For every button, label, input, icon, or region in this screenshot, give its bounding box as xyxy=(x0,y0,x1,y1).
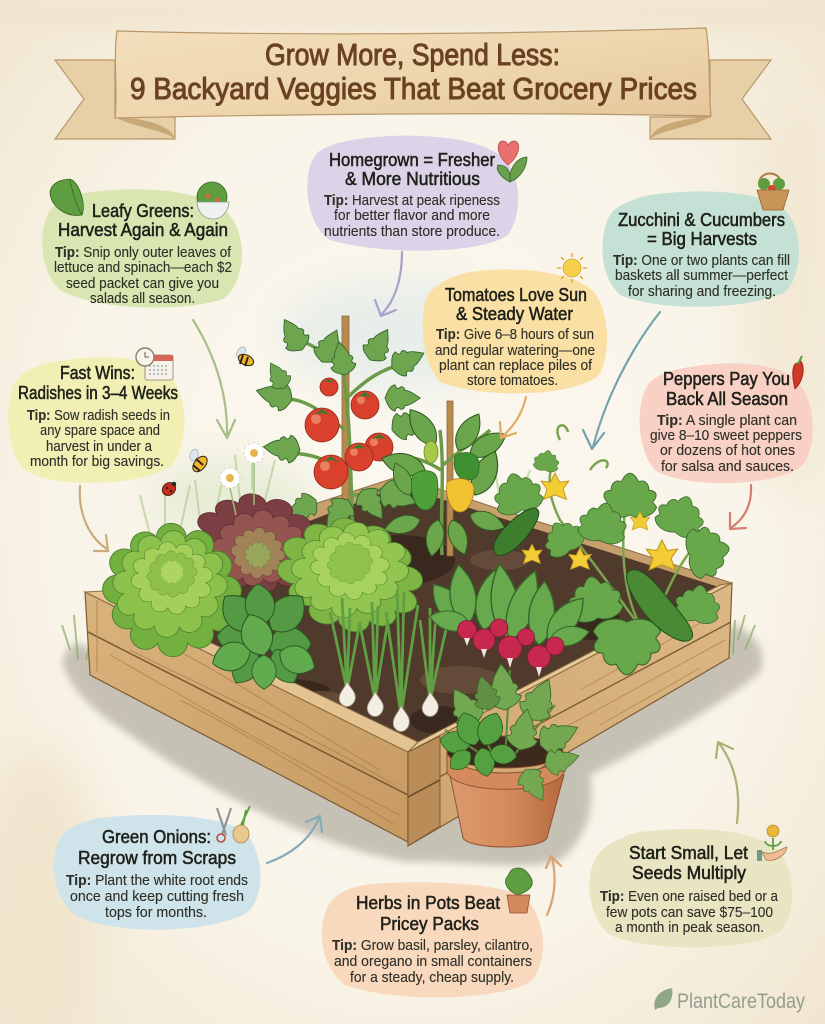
icon: scissors and onion xyxy=(217,806,250,843)
watermark: PlantCareToday xyxy=(654,988,805,1013)
icon: salad bowl xyxy=(197,182,229,219)
callout: homegrown: & More Nutritious xyxy=(345,168,480,189)
peppers xyxy=(411,441,479,512)
callout: tomatoes: Tip: Give 6–8 hours of sun xyxy=(436,327,594,343)
callout: leafy greens xyxy=(42,179,242,308)
green onions xyxy=(330,590,447,732)
callout: fast wins: month for big savings. xyxy=(30,454,164,470)
callout: zucchini and cucumbers: Zucchini & Cucumbers xyxy=(618,209,785,230)
callout: fast wins: any spare space and xyxy=(40,423,160,439)
callout: green onions: Green Onions: xyxy=(102,826,211,847)
raised wooden bed xyxy=(85,476,732,846)
callout: tomatoes: plant can replace piles of xyxy=(439,358,593,374)
callout: green onions xyxy=(54,806,260,930)
callout: leafy greens: Tip: Snip only outer leaves of xyxy=(55,245,232,261)
icon: chili xyxy=(793,356,803,389)
callout: peppers: for salsa and sauces. xyxy=(661,459,794,475)
callout: homegrown: nutrients than store produce. xyxy=(324,224,500,240)
callout: start small: few pots can save $75–100 xyxy=(606,905,773,921)
arrow: peppers xyxy=(730,485,751,529)
arrow: radishes xyxy=(80,486,108,551)
callout: zucchini and cucumbers: Tip: One or two plants can fill xyxy=(613,253,790,269)
title text: 9 Backyard Veggies That Beat Grocery Prices xyxy=(130,71,697,106)
title banner xyxy=(55,28,771,139)
cucumber and zucchini vines xyxy=(489,425,733,675)
tomato stake xyxy=(342,316,349,531)
callout: tomatoes: & Steady Water xyxy=(456,303,573,324)
arrow: herbs xyxy=(546,856,561,915)
lettuce trio xyxy=(90,484,433,670)
callout: leafy greens: salads all season. xyxy=(90,291,195,307)
icon: coin plant in hand xyxy=(757,825,787,861)
callout: green onions: tops for months. xyxy=(105,905,207,921)
spinach xyxy=(208,582,320,689)
callout: tomatoes: store tomatoes. xyxy=(467,373,558,389)
ladybug xyxy=(160,480,178,498)
callout: start small xyxy=(589,825,792,947)
potted herbs xyxy=(438,662,584,807)
callout: fast wins: harvest in under a xyxy=(46,439,153,455)
callout: herbs: Pricey Packs xyxy=(380,913,479,934)
callout: fast wins: Radishes in 3–4 Weeks xyxy=(18,382,178,403)
cucumbers xyxy=(494,508,693,641)
bed: front corner post xyxy=(408,736,440,846)
callout: leafy greens: Harvest Again & Again xyxy=(58,219,228,240)
icon: potted herb xyxy=(505,868,532,913)
arrow: green onions xyxy=(267,816,322,863)
arrow: tomatoes xyxy=(500,397,526,438)
callout: peppers: Tip: A single plant can xyxy=(657,413,797,429)
green lettuce right xyxy=(267,504,433,646)
callout: peppers xyxy=(640,356,813,483)
callout: leafy greens: lettuce and spinach—each $2 xyxy=(54,260,232,276)
callout: start small: Seeds Multiply xyxy=(632,862,747,883)
bed: right wall xyxy=(408,583,732,846)
icon: clock and calendar xyxy=(136,348,173,380)
callout: start small: Tip: Even one raised bed or a xyxy=(600,889,779,905)
bed: soil xyxy=(105,486,722,745)
callout: zucchini and cucumbers: baskets all summer—perfect xyxy=(615,268,788,284)
pepper plant xyxy=(379,401,511,558)
bed: left wall xyxy=(85,592,408,842)
arrow: homegrown xyxy=(375,252,402,316)
arrow: zucchini xyxy=(583,312,660,449)
callout: peppers: Back All Season xyxy=(666,388,788,409)
arrow: leafy greens xyxy=(193,320,235,438)
herb pot xyxy=(438,662,584,847)
callout: peppers: give 8–10 sweet peppers xyxy=(650,428,802,444)
callout: green onions: once and keep cutting fresh xyxy=(70,889,244,905)
callout: zucchini and cucumbers xyxy=(602,174,799,307)
callout: leafy greens: seed packet can give you xyxy=(66,276,219,292)
callout: fast wins xyxy=(8,348,185,483)
callout: green onions: Regrow from Scraps xyxy=(78,847,236,868)
ground shadow under the bed xyxy=(62,625,762,865)
arrows xyxy=(80,252,751,915)
callout: herbs: Tip: Grow basil, parsley, cilantro, xyxy=(332,938,533,954)
callout: zucchini and cucumbers: = Big Harvests xyxy=(647,228,757,249)
bee top xyxy=(234,345,255,368)
callout: herbs: Herbs in Pots Beat xyxy=(356,892,500,913)
terracotta pot xyxy=(447,736,564,847)
watermark: PlantCareToday: PlantCareToday xyxy=(677,990,805,1013)
callout: zucchini and cucumbers: for sharing and freezing. xyxy=(628,284,776,300)
bed: back walls xyxy=(100,476,732,605)
icon: lettuce xyxy=(50,179,83,215)
callout: peppers: Peppers Pay You xyxy=(663,368,790,389)
bees and ladybug xyxy=(160,345,264,515)
callout: herbs: and oregano in small containers xyxy=(334,954,532,970)
callout: leafy greens: Leafy Greens: xyxy=(92,200,194,221)
callout: tomatoes: Tomatoes Love Sun xyxy=(445,284,587,305)
callout: homegrown xyxy=(307,136,527,251)
bee lower xyxy=(188,448,210,474)
callout: herbs xyxy=(322,868,543,997)
title text: Grow More, Spend Less: xyxy=(265,37,560,72)
callout: start small: Start Small, Let xyxy=(629,842,748,863)
garden wash: grasses behind bed xyxy=(62,445,755,660)
red lettuce xyxy=(186,484,330,602)
callout: tomatoes xyxy=(423,253,607,393)
radishes xyxy=(424,562,592,677)
daisies xyxy=(220,443,264,515)
icon: sun xyxy=(557,253,587,283)
callout: homegrown: Tip: Harvest at peak ripeness xyxy=(324,193,500,209)
callout: homegrown: for better flavor and more xyxy=(334,208,490,224)
green lettuce left xyxy=(90,510,254,670)
callout: green onions: Tip: Plant the white root ends xyxy=(66,873,248,889)
callout: fast wins: Fast Wins: xyxy=(60,362,135,383)
callout: herbs: for a steady, cheap supply. xyxy=(350,970,514,986)
callout: homegrown: Homegrown = Fresher xyxy=(329,149,495,170)
arrow: start small xyxy=(716,742,738,823)
callout: tomatoes: and regular watering—one xyxy=(435,343,595,359)
tomato plant xyxy=(253,313,431,538)
icon: heart with leaves xyxy=(497,141,527,182)
callout: fast wins: Tip: Sow radish seeds in xyxy=(27,408,170,424)
callout: peppers: or dozens of hot ones xyxy=(660,443,795,459)
pepper stake xyxy=(447,401,453,556)
icon: basket xyxy=(757,174,789,210)
title text xyxy=(130,37,697,106)
squash flowers xyxy=(522,473,678,570)
tomatoes xyxy=(305,378,393,489)
callout: start small: a month in peak season. xyxy=(615,920,764,936)
